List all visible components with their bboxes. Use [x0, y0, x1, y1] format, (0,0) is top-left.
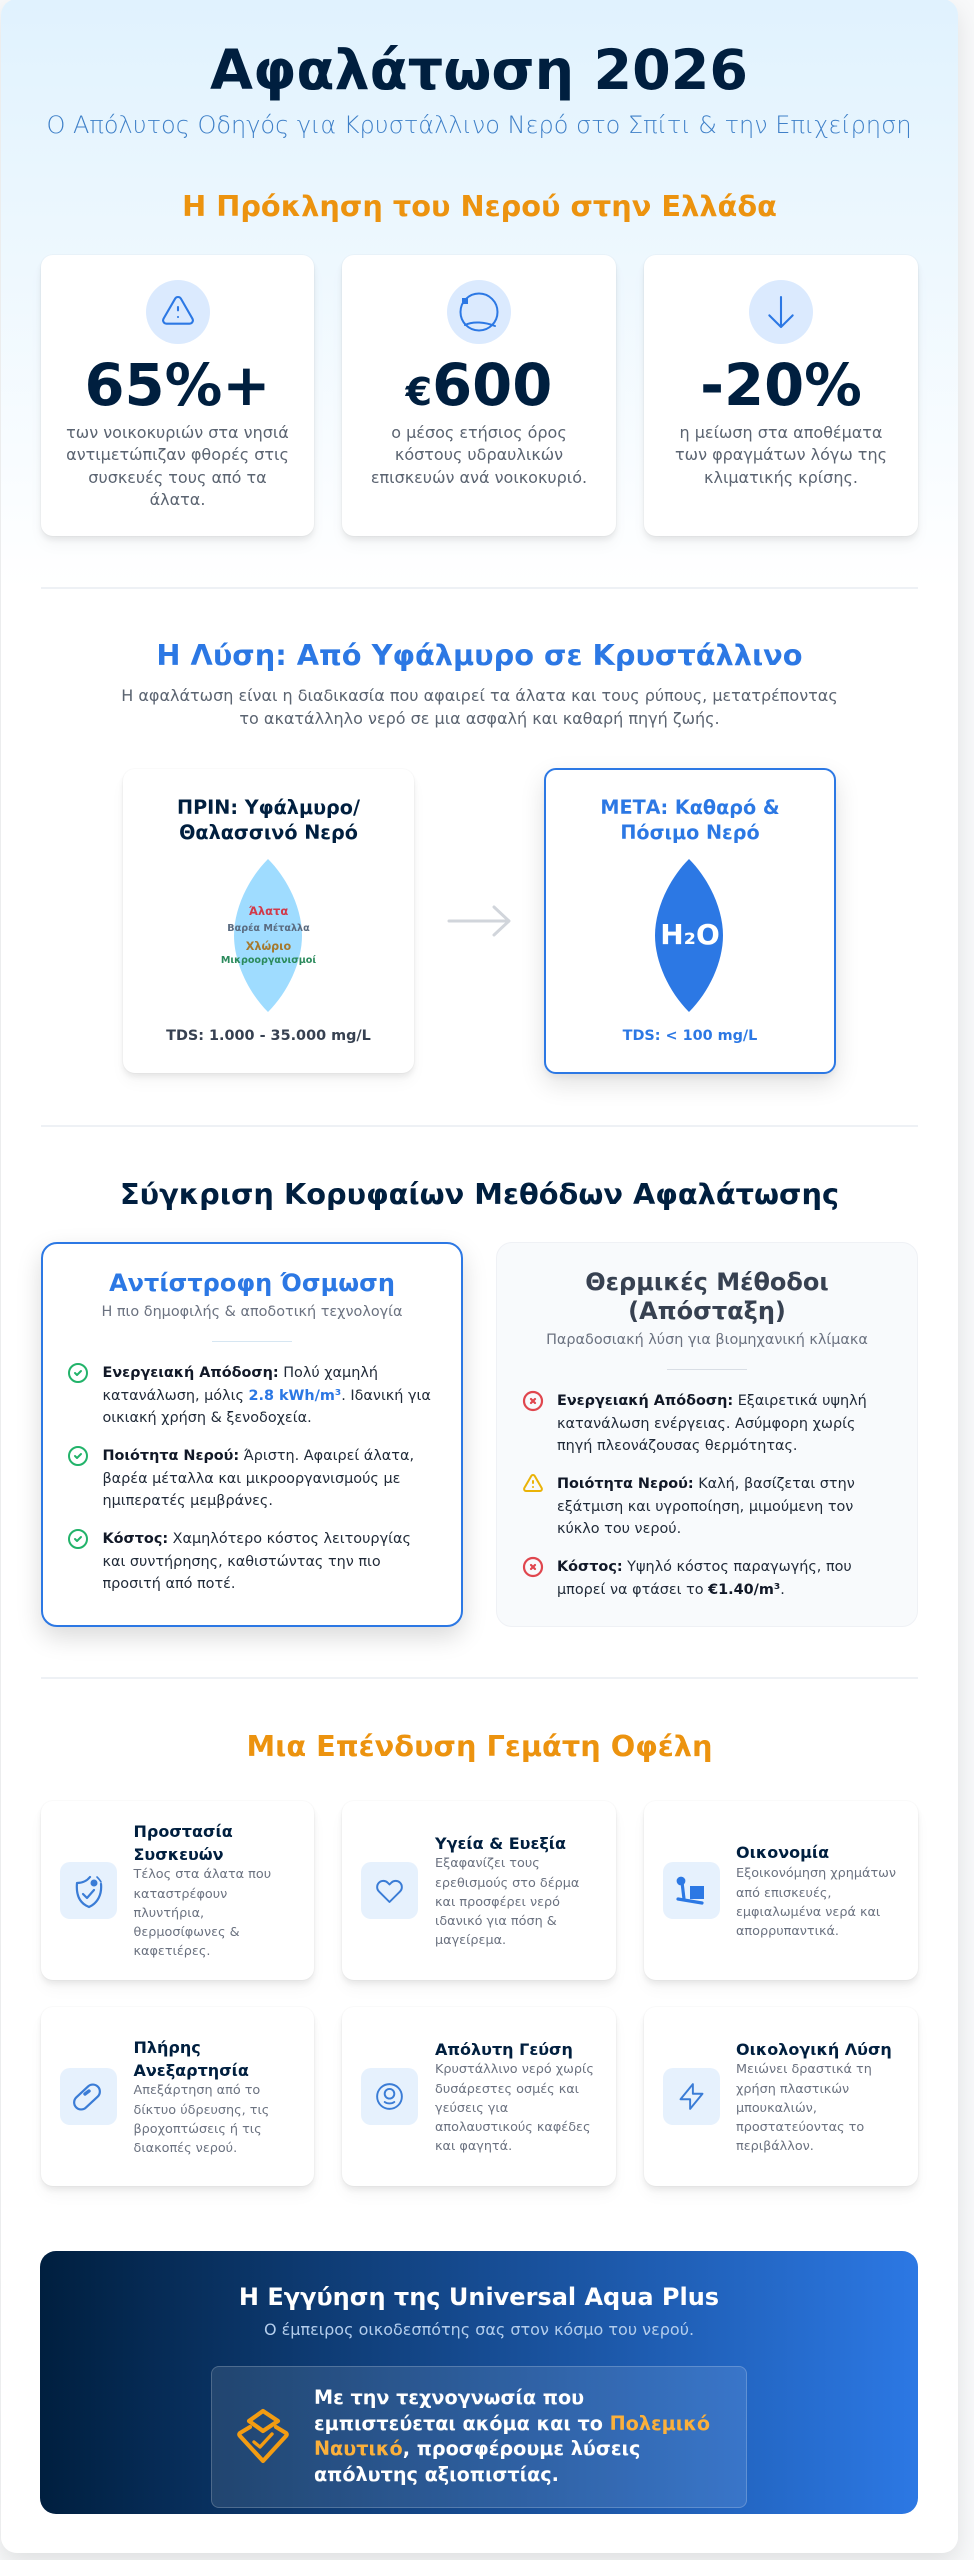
panel: health: [342, 1801, 616, 1980]
panel: appliance protection: [41, 1801, 314, 1980]
card title: Συσκευών: [134, 1845, 224, 1864]
stat text: επισκευών ανά νοικοκυριό.: [371, 468, 587, 487]
panel: after: [544, 768, 836, 1074]
method title: (Απόσταξη): [628, 1296, 786, 1324]
callout text: απόλυτης αξιοπιστίας.: [314, 2463, 559, 2486]
icon: badge: [237, 2408, 289, 2464]
icon: cross: [522, 1390, 544, 1412]
card title: [134, 2038, 249, 2080]
card title: Υγεία & Ευεξία: [435, 1834, 566, 1853]
card text: [736, 2062, 872, 2154]
icon: dolly: [663, 1862, 720, 1919]
method title: Αντίστροφη Όσμωση: [109, 1269, 395, 1297]
card text: και προσφέρει νερό: [435, 1895, 560, 1910]
arrow: [448, 906, 510, 936]
card text: προστατεύοντας το: [736, 2120, 864, 2135]
icon: cross: [522, 1556, 544, 1578]
card text: Εξαφανίζει τους: [435, 1856, 540, 1871]
icon: arrow down: [749, 280, 813, 344]
panel: before: [123, 769, 414, 1073]
card text: [134, 2083, 269, 2156]
before title: ΠΡΙΝ: Υφάλμυρο/: [177, 796, 360, 819]
drawback: energy: Ενεργειακή Απόδοση: Εξαιρετικά υψηλή: [557, 1393, 867, 1409]
panel: thermal methods: [496, 1242, 918, 1627]
stat text: αντιμετώπιζαν φθορές στις: [66, 445, 289, 464]
callout text: Με την τεχνογνωσία που: [314, 2386, 584, 2409]
card text: καφετιέρες.: [134, 1944, 210, 1959]
after title: ΜΕΤΑ: Καθαρό &: [600, 796, 780, 819]
benefit: quality: ημιπερατές μεμβράνες.: [102, 1493, 273, 1509]
stat number: -20%: [700, 352, 862, 419]
stat text: κόστους υδραυλικών: [395, 445, 563, 464]
card text: απολαυστικούς καφέδες: [435, 2120, 590, 2135]
panel: taste: [342, 2007, 616, 2186]
contaminant labels: Άλατα: [249, 904, 288, 918]
card text: εμφιαλωμένα νερά και: [736, 1905, 880, 1920]
benefit: cost: Κόστος: Χαμηλότερο κόστος λειτουργίας: [102, 1531, 411, 1547]
card text: Εξοικονόμηση χρημάτων: [736, 1866, 896, 1881]
card title: Οικονομία: [736, 1843, 829, 1862]
method subtitle: Η πιο δημοφιλής & αποδοτική τεχνολογία: [101, 1304, 403, 1320]
stat text: των φραγμάτων λόγω της: [675, 445, 887, 464]
card text: Απεξάρτηση από το: [134, 2083, 260, 2098]
panel: before: Βαρέα Μέταλλα: [227, 923, 310, 934]
card text: πλυντήρια,: [134, 1906, 204, 1921]
card title: Οικολογική Λύση: [736, 2040, 892, 2059]
callout text: εμπιστεύεται ακόμα και το Πολεμικό: [314, 2412, 710, 2435]
panel: before: Χλώριο: [246, 940, 291, 953]
method title: Θερμικές Μέθοδοι: [585, 1268, 829, 1296]
heading: challenge: Η Πρόκληση του Νερού στην Ελλάδα: [182, 189, 777, 223]
benefit: quality: βαρέα μέταλλα και μικροοργανισμούς με: [102, 1471, 400, 1487]
after title: [600, 796, 780, 844]
icon: warning: [146, 280, 210, 344]
card title: Ανεξαρτησία: [134, 2061, 249, 2080]
after title: Πόσιμο Νερό: [620, 821, 760, 844]
card title: Απόλυτη Γεύση: [435, 2040, 573, 2059]
icon: capsule tag: [60, 2068, 117, 2125]
benefit: cost: και συντήρησης, καθιστώντας την πιο: [102, 1554, 381, 1570]
card text: Τέλος στα άλατα που: [134, 1867, 271, 1882]
benefit: energy: κατανάλωση, μόλις 2.8 kWh/m³. Ιδανική για: [102, 1388, 431, 1404]
card text: [736, 1866, 896, 1939]
benefit: energy: [102, 1365, 431, 1426]
panel: reverse osmosis: [41, 1242, 463, 1627]
card text: δυσάρεστες οσμές και: [435, 2082, 579, 2097]
stat text: κλιματικής κρίσης.: [704, 468, 858, 487]
drawback: cost: [557, 1559, 852, 1598]
benefit: cost: προσιτή από ποτέ.: [102, 1576, 235, 1592]
stat text: άλατα.: [150, 490, 205, 509]
card text: χρήση πλαστικών: [736, 2082, 849, 2097]
drawback: energy: πηγή πλεονάζουσας θερμότητας.: [557, 1438, 798, 1454]
stat text: ο μέσος ετήσιος όρος: [391, 423, 567, 442]
card text: θερμοσίφωνες &: [134, 1925, 240, 1940]
icon: check: [68, 1529, 88, 1549]
text: solution intro: το ακατάλληλο νερό σε μια ασφαλή και καθαρή πηγή ζωής.: [239, 709, 720, 728]
drawback: energy: κατανάλωση ενέργειας. Ασύμφορη χωρίς: [557, 1416, 855, 1432]
panel: ecology: [644, 2007, 918, 2186]
callout text: Ναυτικό, προσφέρουμε λύσεις: [314, 2437, 640, 2460]
icon: brackish water drop: [234, 859, 302, 1012]
card text: μαγείρεμα.: [435, 1933, 506, 1948]
icon: clean water drop: [655, 859, 723, 1012]
panel: stat 600 euro: [342, 255, 616, 536]
card text: απορρυπαντικά.: [736, 1924, 839, 1939]
text: solution intro: [121, 686, 838, 728]
icon: shield: [60, 1862, 117, 1919]
heading: benefits: Μια Επένδυση Γεμάτη Οφέλη: [246, 1729, 712, 1763]
panel: independence: [41, 2007, 314, 2186]
panel: guarantee: [40, 2251, 918, 2514]
TDS value: TDS: < 100 mg/L: [623, 1028, 757, 1044]
guarantee title: Η Εγγύηση της Universal Aqua Plus: [239, 2283, 719, 2311]
card text: Μειώνει δραστικά τη: [736, 2062, 872, 2077]
card title: [134, 1822, 233, 1864]
stat number: €600: [406, 352, 552, 419]
drawback: quality: [557, 1476, 855, 1537]
benefit: energy: οικιακή χρήση & ξενοδοχεία.: [102, 1410, 312, 1426]
card text: καταστρέφουν: [134, 1887, 227, 1902]
benefit: quality: [102, 1448, 414, 1509]
icon: check: [68, 1363, 88, 1383]
icon: heart: [361, 1862, 418, 1919]
panel: stat minus 20%: [644, 255, 918, 536]
method title: [585, 1268, 829, 1324]
stat text: των νοικοκυριών στα νησιά: [66, 423, 289, 442]
drawback: quality: εξάτμιση και υγροποίηση, μιμούμενη τον: [557, 1499, 853, 1515]
card text: [133, 1867, 271, 1959]
card text: και φαγητά.: [435, 2139, 512, 2154]
card text: γεύσεις για: [435, 2101, 508, 2116]
benefit: quality: Ποιότητα Νερού: Άριστη. Αφαιρεί άλατα,: [102, 1448, 414, 1464]
stat text: [675, 423, 887, 487]
drawback: quality: κύκλο του νερού.: [557, 1521, 681, 1537]
TDS value: TDS: 1.000 - 35.000 mg/L: [166, 1028, 371, 1044]
panel: savings: [644, 1801, 918, 1980]
H2O label: H₂O: [660, 918, 720, 951]
stat text: η μείωση στα αποθέματα: [680, 423, 882, 442]
before title: Θαλασσινό Νερό: [179, 821, 358, 844]
icon: check: [68, 1446, 88, 1466]
drawback: energy: [557, 1393, 867, 1454]
card title: Πλήρης: [134, 2038, 201, 2057]
card text: ιδανικό για πόση &: [435, 1914, 557, 1929]
card text: ερεθισμούς στο δέρμα: [435, 1876, 579, 1891]
drawback: cost: μπορεί να φτάσει το €1.40/m³.: [557, 1582, 785, 1598]
card title: Προστασία: [134, 1822, 233, 1841]
card text: μπουκαλιών,: [736, 2101, 817, 2116]
card text: από επισκευές,: [736, 1886, 831, 1901]
heading: solution: Η Λύση: Από Υφάλμυρο σε Κρυστάλλινο: [156, 638, 803, 672]
text: solution intro: Η αφαλάτωση είναι η διαδικασία που αφαιρεί τα άλατα και τους ρύπους, μετατρέποντας: [121, 686, 838, 705]
icon: target circle: [361, 2068, 418, 2125]
heading: comparison: Σύγκριση Κορυφαίων Μεθόδων Αφαλάτωσης: [120, 1177, 839, 1211]
stat text: συσκευές τους από τα: [88, 468, 267, 487]
stat number: 65%+: [84, 352, 271, 419]
callout: navy trust: [211, 2366, 747, 2508]
icon: warning: [523, 1474, 543, 1492]
drawback: quality: Ποιότητα Νερού: Καλή, βασίζεται στην: [557, 1476, 855, 1492]
before title: [177, 796, 360, 844]
card text: δίκτυο ύδρευσης, τις: [134, 2103, 269, 2118]
callout text: [314, 2386, 710, 2486]
card text: [435, 2062, 594, 2154]
method subtitle: Παραδοσιακή λύση για βιομηχανική κλίμακα: [546, 1332, 868, 1348]
card text: περιβάλλον.: [736, 2139, 814, 2154]
card text: διακοπές νερού.: [134, 2141, 237, 2156]
icon: lightning: [663, 2068, 720, 2125]
stat text: [66, 423, 289, 509]
benefit: cost: [102, 1531, 411, 1592]
guarantee subtitle: Ο έμπειρος οικοδεσπότης σας στον κόσμο του νερού.: [264, 2320, 694, 2339]
card text: Κρυστάλλινο νερό χωρίς: [435, 2062, 594, 2077]
panel: stat 65%: [41, 255, 314, 536]
panel: before: Μικροοργανισμοί: [221, 955, 316, 966]
icon: coin cycle: [447, 280, 511, 344]
subtitle: Ο Απόλυτος Οδηγός για Κρυστάλλινο Νερό στο Σπίτι & την Επιχείρηση: [46, 111, 912, 139]
card text: [435, 1856, 579, 1948]
stat text: [371, 423, 587, 487]
card text: βροχοπτώσεις ή τις: [134, 2122, 262, 2137]
drawback: cost: Κόστος: Υψηλό κόστος παραγωγής, που: [557, 1559, 852, 1575]
title: Αφαλάτωση 2026: [210, 38, 748, 103]
benefit: energy: Ενεργειακή Απόδοση: Πολύ χαμηλή: [102, 1365, 378, 1381]
